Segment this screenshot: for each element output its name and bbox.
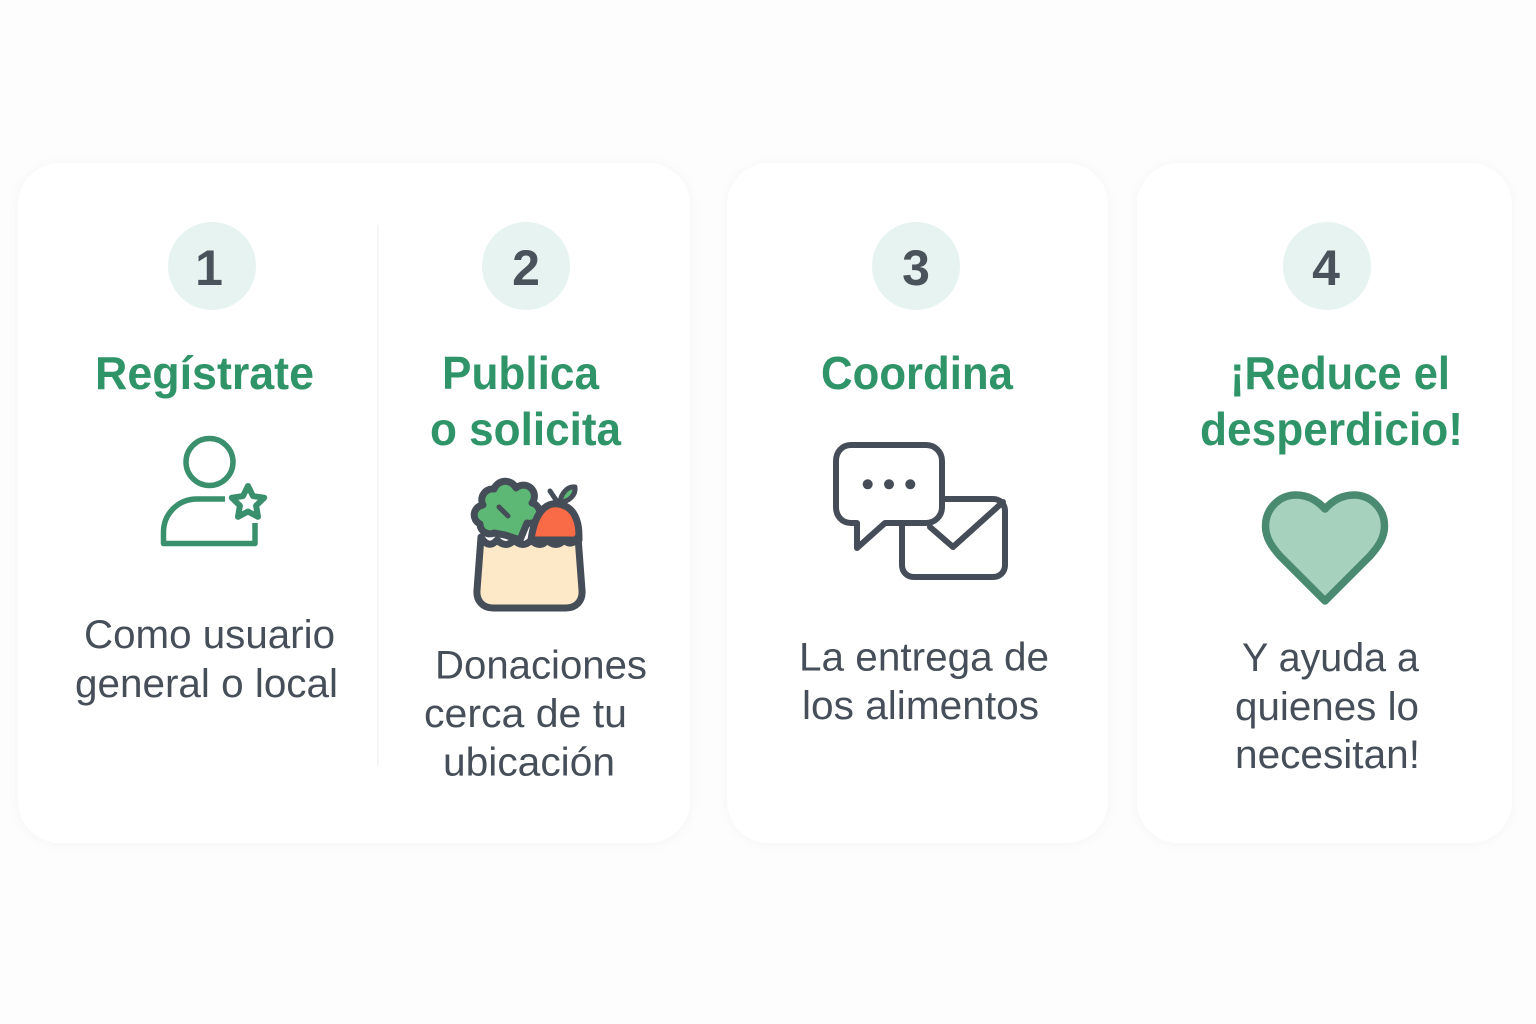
description: Como usuario general o local: Como usuario: [84, 613, 335, 657]
description: La entrega de los alimentos: [799, 636, 1049, 728]
number badge 4: 4: [1312, 240, 1340, 296]
icon: grocery bag with vegetables: [474, 481, 582, 608]
heading: Publica o solicita: [430, 347, 621, 455]
icon: heart: [1266, 495, 1384, 601]
step 2: Publica o solicita: [424, 222, 647, 784]
heading: Publica o solicita: o solicita: [430, 403, 621, 455]
panel: card for step 3: [727, 163, 1108, 843]
description: Donaciones cerca de tu ubicación: cerca de tu: [424, 692, 627, 736]
description: Y ayuda a quienes lo necesitan!: necesitan!: [1235, 733, 1420, 777]
description: La entrega de los alimentos: los alimentos: [802, 684, 1039, 728]
description: Y ayuda a quienes lo necesitan!: Y ayuda a: [1242, 636, 1420, 680]
panel: card for steps 1 and 2: [18, 163, 690, 843]
description: Como usuario general o local: general o local: [75, 662, 338, 706]
number badge 2: [482, 222, 570, 310]
icon: chat bubble and envelope: [836, 445, 1005, 577]
heading: ¡Reduce el desperdicio!: [1200, 347, 1463, 455]
number badge 3: 3: [902, 240, 930, 296]
heading: ¡Reduce el desperdicio!: ¡Reduce el: [1230, 347, 1450, 399]
icon: user with star: [164, 438, 264, 544]
number badge 4: [1283, 222, 1371, 310]
number badge 1: 1: [195, 240, 223, 296]
description: Como usuario general o local: [75, 613, 338, 706]
heading: Publica o solicita: Publica: [442, 347, 599, 399]
heading: ¡Reduce el desperdicio!: desperdicio!: [1200, 403, 1463, 455]
heading: Regístrate: Regístrate: [95, 347, 314, 399]
panel: card for step 4: [1137, 163, 1512, 843]
number badge 2: 2: [512, 240, 540, 296]
description: Y ayuda a quienes lo necesitan!: [1235, 636, 1420, 777]
step 1: Regístrate: [75, 222, 338, 706]
description: Donaciones cerca de tu ubicación: Donaciones: [435, 644, 647, 688]
number badge 3: [872, 222, 960, 310]
step 4: ¡Reduce el desperdicio!: [1200, 222, 1463, 777]
description: Donaciones cerca de tu ubicación: ubicación: [443, 740, 615, 784]
heading: Coordina: Coordina: [821, 347, 1013, 399]
description: La entrega de los alimentos: La entrega de: [799, 636, 1049, 680]
number badge 1: [168, 222, 256, 310]
description: Donaciones cerca de tu ubicación: [424, 644, 647, 784]
step 3: Coordina: [799, 222, 1049, 728]
description: Y ayuda a quienes lo necesitan!: quienes lo: [1235, 685, 1419, 729]
